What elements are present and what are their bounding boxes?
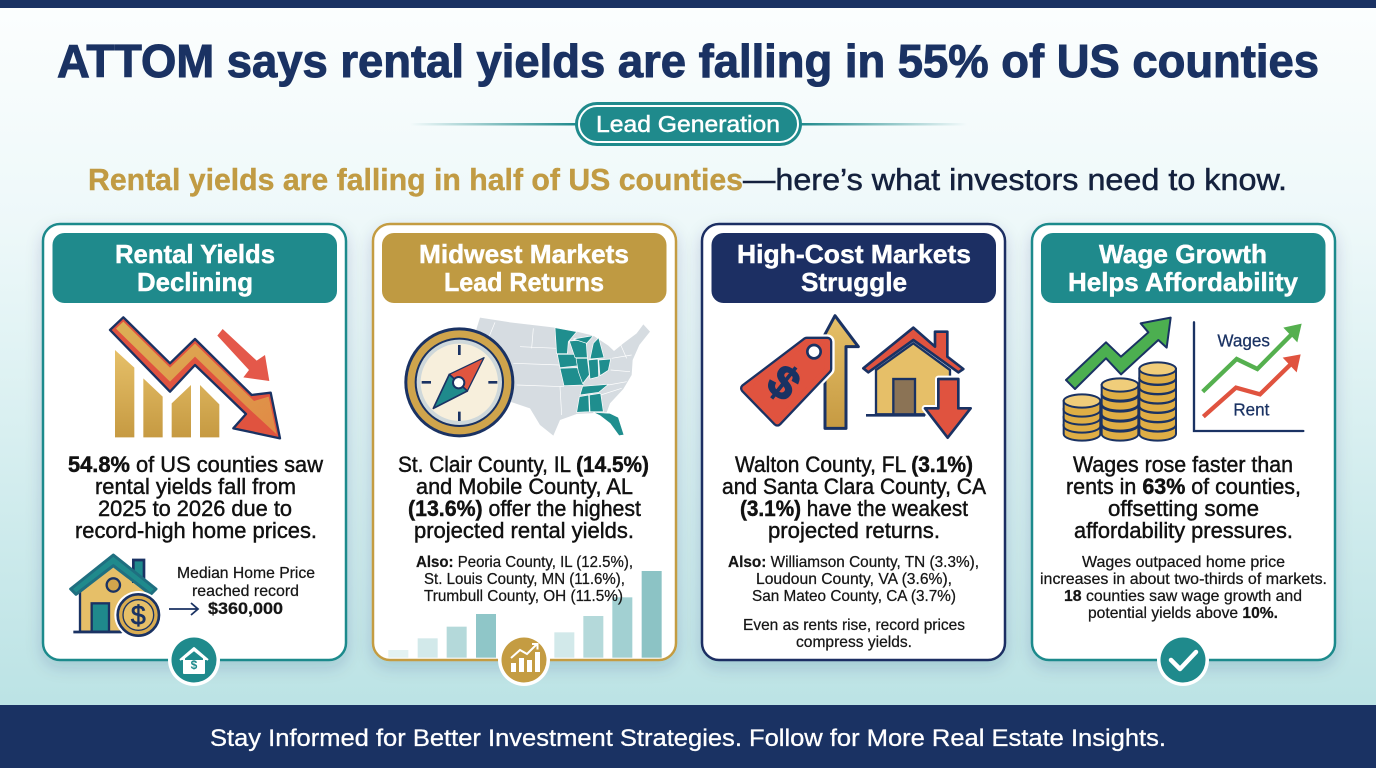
note: compress yields. [796,634,912,651]
heading: Midwest Markets [419,239,629,269]
additional counties: Loudoun County, VA (3.6%), [756,571,952,588]
panel: midwest markets lead returns [373,224,676,686]
key statistic: 2025 to 2026 due to [98,496,292,521]
heading: Helps Affordability [1068,267,1299,297]
icon: house with falling arrow [863,328,971,438]
note [743,617,965,651]
median home price: Median Home Price [177,565,315,582]
subtitle: Rental yields are falling in half of US counties [88,162,743,197]
tag: Lead Generation [410,102,967,146]
key statistic: record-high home prices. [75,518,317,543]
icon: falling bar chart with arrow [110,317,280,438]
key statistic: (13.6%) offer the highest [408,496,641,521]
median home price: $360,000 [208,599,283,618]
subtitle [88,162,1287,197]
chart: wages vs rent: Wages [1217,331,1270,351]
heading [712,233,996,303]
icon: compass [404,327,514,437]
key statistic: Wages rose faster than [1073,452,1293,477]
chart: wages vs rent: Rent [1233,400,1269,420]
subtitle: —here’s what investors need to know. [743,162,1287,197]
badge: house [168,634,220,686]
icon: house with dollar coin: $ [131,600,146,630]
additional counties: Also: Peoria County, IL (12.5%), [416,554,633,571]
supporting text: 18 counties saw wage growth and [1064,588,1302,605]
key statistic: Walton County, FL (3.1%) [735,452,973,477]
footer banner: Stay Informed for Better Investment Strategies. Follow for More Real Estate Insights. [210,725,1166,752]
median home price [177,565,315,618]
key statistic: and Mobile County, AL [416,474,633,499]
heading [1041,233,1326,303]
tag: Lead Generation: Lead Generation [596,111,780,137]
key statistic: projected rental yields. [414,518,634,543]
map: US with highlighted states [460,318,650,436]
key statistic [1066,452,1301,543]
icon: house with dollar coin [71,555,162,639]
heading: Struggle [801,267,907,297]
arrow [169,603,198,615]
additional counties: St. Louis County, MN (11.6%), [424,571,625,588]
icon: coins and rising arrow [1064,318,1176,441]
heading: Wage Growth [1099,239,1267,269]
key statistic: projected returns. [768,518,940,543]
heading: Declining [137,267,253,297]
panel: wage growth helps affordability [1032,224,1335,686]
additional counties: Also: Williamson County, TN (3.3%), [728,554,979,571]
key statistic [722,452,986,543]
panel: high-cost markets struggle [702,224,1005,660]
median home price: reached record [192,583,299,600]
heading [382,233,666,303]
title: ATTOM says rental yields are falling in 55% of US counties [57,35,1319,87]
panel: rental yields declining [43,224,346,686]
additional counties [416,554,633,605]
heading: Lead Returns [444,267,604,297]
background bars [388,571,662,658]
key statistic: (3.1%) have the weakest [740,496,968,521]
key statistic [68,452,323,543]
supporting text [1040,554,1327,622]
additional counties: Trumbull County, OH (11.5%) [424,588,623,605]
heading [52,233,337,303]
heading: Rental Yields [115,239,275,269]
footer banner [0,705,1376,768]
supporting text: increases in about two-thirds of markets. [1040,571,1327,588]
key statistic: rental yields fall from [95,474,296,499]
key statistic: affordability pressures. [1074,518,1293,543]
icon: price tag with rising arrow: $ [758,354,810,411]
key statistic [398,452,649,543]
badge: check mark [1157,634,1209,686]
key statistic: rents in 63% of counties, [1066,474,1301,499]
key statistic: St. Clair County, IL (14.5%) [398,452,649,477]
supporting text: Wages outpaced home price [1082,554,1285,571]
heading: High-Cost Markets [737,239,971,269]
additional counties [728,554,979,605]
supporting text: potential yields above 10%. [1088,605,1278,622]
key statistic: offsetting some [1108,496,1259,521]
chart: wages vs rent [1194,322,1303,431]
additional counties: San Mateo County, CA (3.7%) [752,588,956,605]
key statistic: and Santa Clara County, CA [722,474,986,499]
key statistic: 54.8% of US counties saw [68,452,323,477]
note: Even as rents rise, record prices [743,617,965,634]
badge: house: $ [191,658,198,672]
badge: growth chart [498,634,550,686]
icon: price tag with rising arrow [745,316,858,428]
